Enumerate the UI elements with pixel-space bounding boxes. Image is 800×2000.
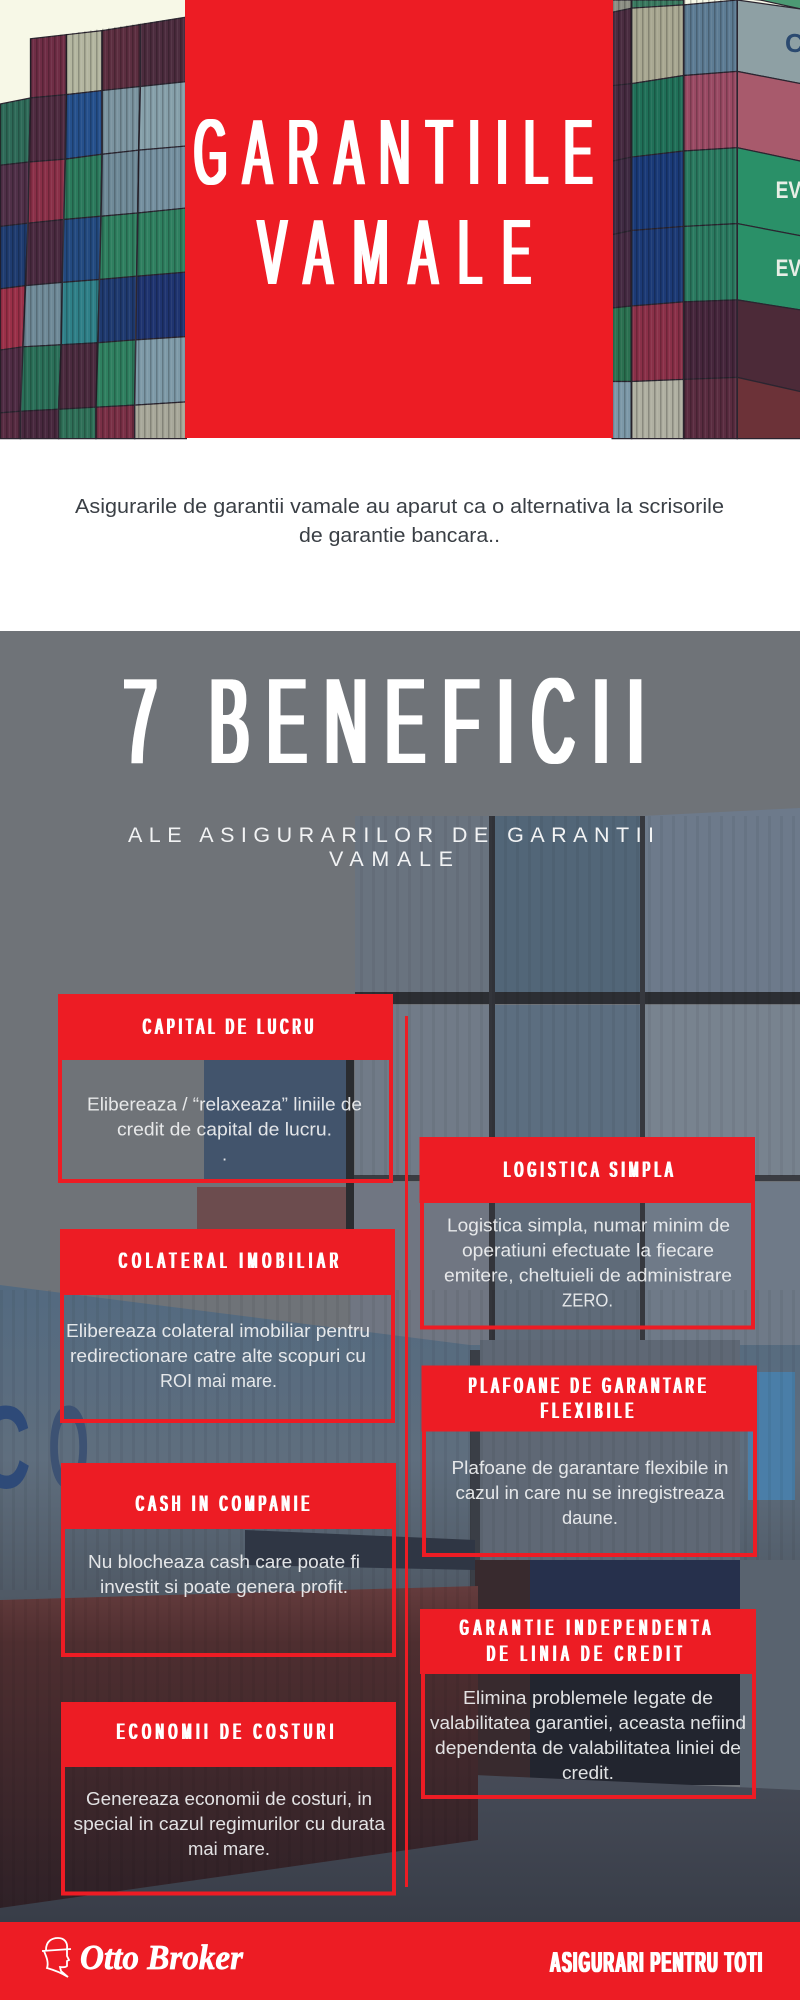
panel: economii de costuri: Genereaza economii de costuri, in bbox=[86, 1788, 372, 1809]
red title panel bbox=[185, 0, 613, 438]
panel: garantie independenta de linia de credit: credit. bbox=[562, 1762, 614, 1783]
panel: colateral imobiliar: COLATERAL IMOBILIAR bbox=[119, 1248, 338, 1273]
panel: garantie independenta de linia de credit: Elimina problemele legate de bbox=[463, 1687, 713, 1708]
title bbox=[194, 100, 592, 305]
logo wordmark: Otto Broker bbox=[80, 1938, 243, 1977]
panel: colateral imobiliar: ROI mai mare. bbox=[160, 1370, 277, 1391]
icon: otto broker head logo bbox=[42, 1938, 71, 1977]
background photo: containers in a port, dark overlay bbox=[0, 631, 800, 1922]
ground bbox=[0, 1775, 800, 1922]
panel: economii de costuri: special in cazul regimurilor cu durata bbox=[74, 1813, 386, 1834]
panel: cash in companie bbox=[61, 1463, 396, 1655]
lower right block bbox=[475, 1560, 745, 1785]
panel: capital de lucru: Elibereaza / “relaxeaza” liniile de bbox=[87, 1094, 362, 1114]
panel: capital de lucru: . bbox=[222, 1144, 227, 1164]
subheading: ALE ASIGURARILOR DE GARANTII bbox=[128, 823, 654, 847]
panel: capital de lucru bbox=[58, 994, 393, 1181]
footer tagline: ASIGURARI PENTRU TOTI bbox=[550, 1945, 762, 1978]
panel: economii de costuri: ECONOMII DE COSTURI bbox=[117, 1719, 333, 1744]
panel: cash in companie: CASH IN COMPANIE bbox=[136, 1491, 309, 1516]
upper container stack bbox=[355, 816, 490, 994]
panel: plafoane de garantare flexibile: FLEXIBILE bbox=[541, 1398, 633, 1423]
title: VAMALE bbox=[258, 200, 531, 305]
panel: logistica simpla: Logistica simpla, numar minim de bbox=[447, 1214, 730, 1236]
panel: colateral imobiliar: redirectionare catre alte scopuri cu bbox=[70, 1345, 366, 1366]
right container stack bbox=[612, 0, 800, 439]
panel: capital de lucru: CAPITAL DE LUCRU bbox=[143, 1014, 313, 1039]
subheading: VAMALE bbox=[329, 847, 453, 871]
panel: garantie independenta de linia de credit: valabilitatea garantiei, aceasta nefiind bbox=[430, 1712, 746, 1733]
hero photo: stacked shipping containers bbox=[0, 0, 800, 439]
panel: colateral imobiliar bbox=[60, 1229, 395, 1421]
subheading bbox=[128, 823, 654, 871]
panel: garantie independenta de linia de credit: DE LINIA DE CREDIT bbox=[487, 1641, 682, 1666]
panel: logistica simpla bbox=[420, 1137, 755, 1328]
panel: economii de costuri: mai mare. bbox=[188, 1838, 270, 1859]
left container stack bbox=[0, 17, 186, 439]
panel: plafoane de garantare flexibile: daune. bbox=[562, 1507, 618, 1528]
heading: 7 beneficii: 7 BENEFICII bbox=[124, 653, 644, 790]
intro text: de garantie bancara.. bbox=[299, 524, 500, 547]
panel: cash in companie: Nu blocheaza cash care poate fi bbox=[88, 1551, 360, 1572]
panel: economii de costuri bbox=[61, 1702, 396, 1894]
panel: garantie independenta de linia de credit bbox=[420, 1609, 756, 1797]
intro text: Asigurarile de garantii vamale au aparut ca o alternativa la scrisorile bbox=[75, 495, 724, 518]
panel: logistica simpla: emitere, cheltuieli de administrare bbox=[444, 1264, 732, 1286]
container lettering bbox=[0, 1381, 89, 1514]
panel: plafoane de garantare flexibile: Plafoane de garantare flexibile in bbox=[452, 1457, 728, 1478]
vertical divider line bbox=[405, 1016, 408, 1887]
panel: logistica simpla: ZERO. bbox=[562, 1290, 613, 1310]
red container bbox=[0, 1586, 478, 1908]
panel: logistica simpla: LOGISTICA SIMPLA bbox=[504, 1157, 673, 1182]
panel: plafoane de garantare flexibile: PLAFOANE DE GARANTARE bbox=[469, 1373, 706, 1398]
intro text bbox=[75, 495, 724, 547]
panel: garantie independenta de linia de credit: GARANTIE INDEPENDENTA bbox=[460, 1615, 710, 1640]
panel: cash in companie: investit si poate genera profit. bbox=[100, 1576, 348, 1597]
mid containers bbox=[0, 1285, 800, 1600]
logos painted on containers bbox=[776, 28, 800, 282]
panel: colateral imobiliar: Elibereaza colateral imobiliar pentru bbox=[66, 1320, 370, 1341]
panel: capital de lucru: credit de capital de lucru. bbox=[117, 1118, 332, 1140]
title: GARANTIILE bbox=[194, 100, 592, 205]
footer band bbox=[0, 1922, 800, 2000]
container ribs texture bbox=[0, 17, 185, 438]
panel: plafoane de garantare flexibile bbox=[422, 1366, 757, 1555]
container lettering: O bbox=[48, 1382, 89, 1514]
panel: logistica simpla: operatiuni efectuate la fiecare bbox=[462, 1240, 714, 1260]
panel: plafoane de garantare flexibile: cazul in care nu se inregistreaza bbox=[456, 1482, 725, 1503]
panel: garantie independenta de linia de credit: dependenta de valabilitatea liniei de bbox=[435, 1737, 741, 1758]
